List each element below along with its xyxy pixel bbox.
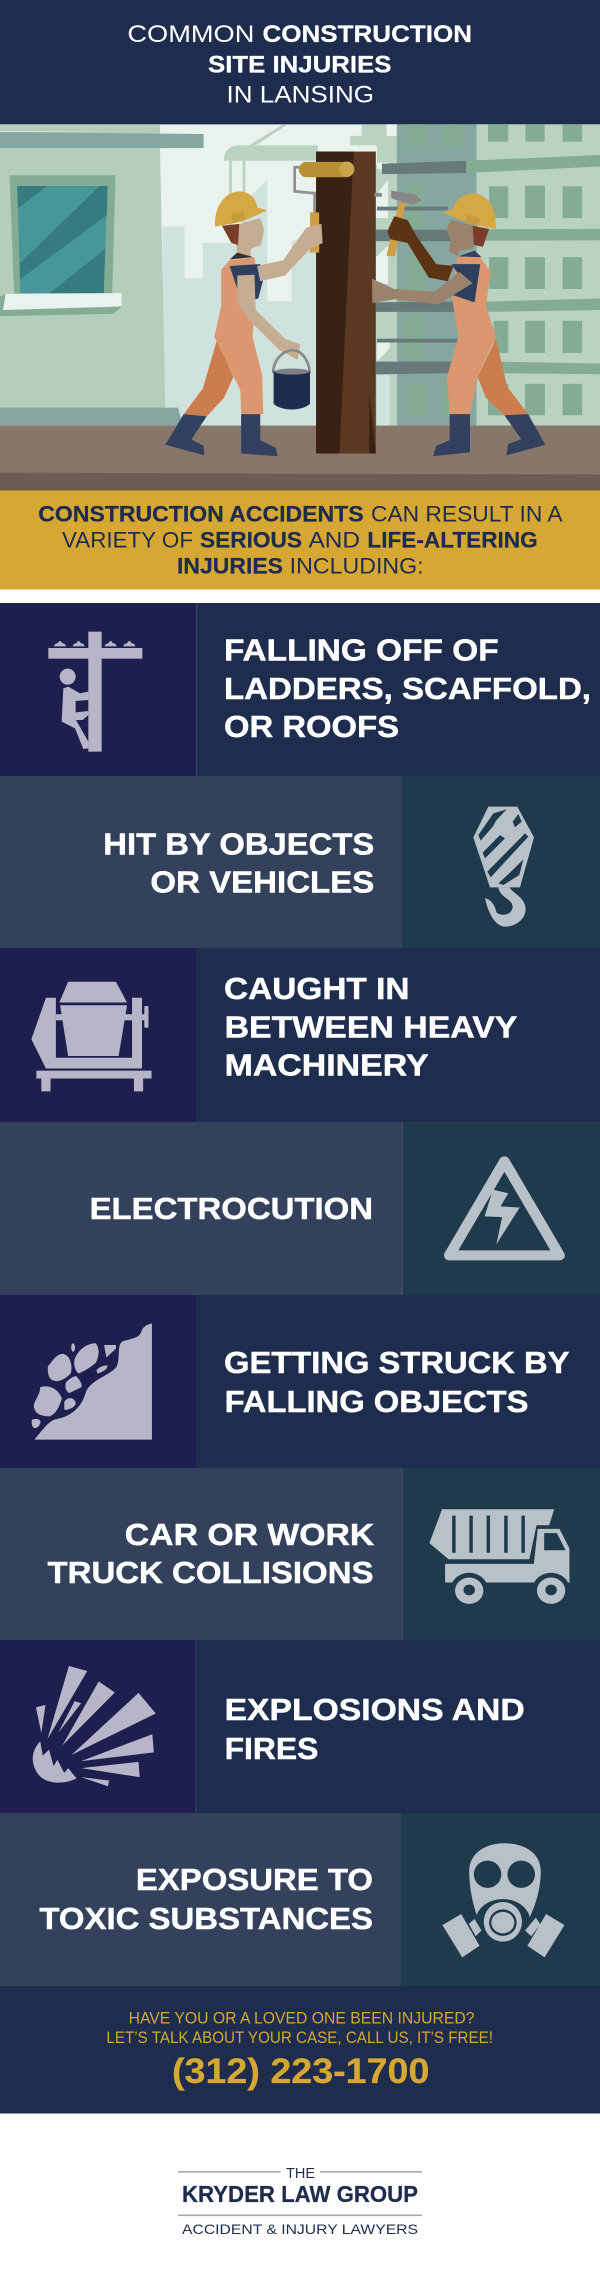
title xyxy=(127,21,472,108)
call to action text xyxy=(106,2010,493,2047)
intro text: CONSTRUCTION ACCIDENTS xyxy=(38,502,364,527)
label: FALLING OBJECTS xyxy=(225,1385,528,1419)
label: TOXIC SUBSTANCES xyxy=(39,1902,373,1936)
label: TRUCK COLLISIONS xyxy=(48,1556,374,1590)
intro text: LIFE-ALTERING xyxy=(367,528,538,553)
row 7: explosions xyxy=(0,1640,600,1813)
row 3: caught in machinery xyxy=(0,948,600,1122)
icon: explosion xyxy=(33,1666,156,1786)
header panel xyxy=(0,0,600,124)
icon: lineman on pole xyxy=(48,632,142,752)
left worker xyxy=(165,191,323,456)
intro text xyxy=(38,502,563,579)
label xyxy=(224,972,517,1083)
row 6: vehicle collisions xyxy=(0,1468,600,1640)
label xyxy=(224,1346,570,1419)
row 5: falling objects xyxy=(0,1295,600,1468)
row 4: electrocution xyxy=(0,1122,600,1295)
intro text: INJURIES xyxy=(177,554,283,579)
illustration: workers at a construction site xyxy=(0,124,600,491)
label: OR VEHICLES xyxy=(150,866,374,900)
wooden post xyxy=(316,152,376,453)
building with window xyxy=(0,124,204,426)
paint roller xyxy=(295,161,354,253)
label xyxy=(225,1693,525,1766)
label: BETWEEN HEAVY xyxy=(225,1010,517,1044)
label xyxy=(103,827,374,900)
ground xyxy=(0,426,600,491)
icon: dump truck xyxy=(429,1509,570,1609)
row 8: toxic exposure xyxy=(0,1813,600,1986)
label xyxy=(39,1863,373,1936)
label: EXPLOSIONS AND xyxy=(225,1693,525,1727)
phone number: (312) 223-1700 xyxy=(172,2052,429,2091)
label: HIT BY OBJECTS xyxy=(103,827,374,861)
call to action panel xyxy=(0,1986,600,2114)
row 1: falling xyxy=(0,603,600,776)
label: MACHINERY xyxy=(225,1049,429,1083)
intro banner xyxy=(0,490,600,590)
logo: ACCIDENT & INJURY LAWYERS xyxy=(182,2221,418,2237)
label: OR ROOFS xyxy=(224,710,399,744)
label: FIRES xyxy=(225,1732,318,1766)
icon: crane hook xyxy=(473,807,534,927)
icon: rockslide xyxy=(32,1324,152,1440)
title: SITE INJURIES xyxy=(208,52,392,79)
label: GETTING STRUCK BY xyxy=(224,1346,570,1380)
background buildings xyxy=(376,124,600,427)
label: FALLING OFF OF xyxy=(224,634,499,668)
label: LADDERS, SCAFFOLD, xyxy=(224,672,591,706)
label: ELECTROCUTION xyxy=(90,1192,373,1226)
intro text: AND xyxy=(308,528,360,553)
logo: KRYDER LAW GROUP xyxy=(182,2181,418,2207)
title: IN LANSING xyxy=(226,82,374,108)
label xyxy=(48,1518,374,1590)
icon: high voltage triangle xyxy=(449,1161,560,1255)
logo: THE xyxy=(286,2165,315,2182)
icon: cement mixer xyxy=(31,982,152,1091)
title: COMMON xyxy=(127,21,254,48)
logo xyxy=(178,2165,422,2237)
intro text: CAN RESULT IN A xyxy=(371,502,563,527)
label: CAUGHT IN xyxy=(224,972,410,1006)
call to action text: LET’S TALK ABOUT YOUR CASE, CALL US, IT’S FREE! xyxy=(106,2029,493,2047)
label xyxy=(224,634,591,744)
call to action text: HAVE YOU OR A LOVED ONE BEEN INJURED? xyxy=(129,2010,474,2028)
label: EXPOSURE TO xyxy=(136,1863,373,1897)
intro text: INCLUDING: xyxy=(290,554,424,579)
row 2: hit by objects xyxy=(0,776,600,948)
label: CAR OR WORK xyxy=(125,1518,374,1552)
right worker xyxy=(372,191,545,456)
intro text: VARIETY OF xyxy=(62,528,193,553)
title: CONSTRUCTION xyxy=(262,21,472,48)
icon: gas mask xyxy=(442,1843,564,1957)
intro text: SERIOUS xyxy=(200,528,302,553)
